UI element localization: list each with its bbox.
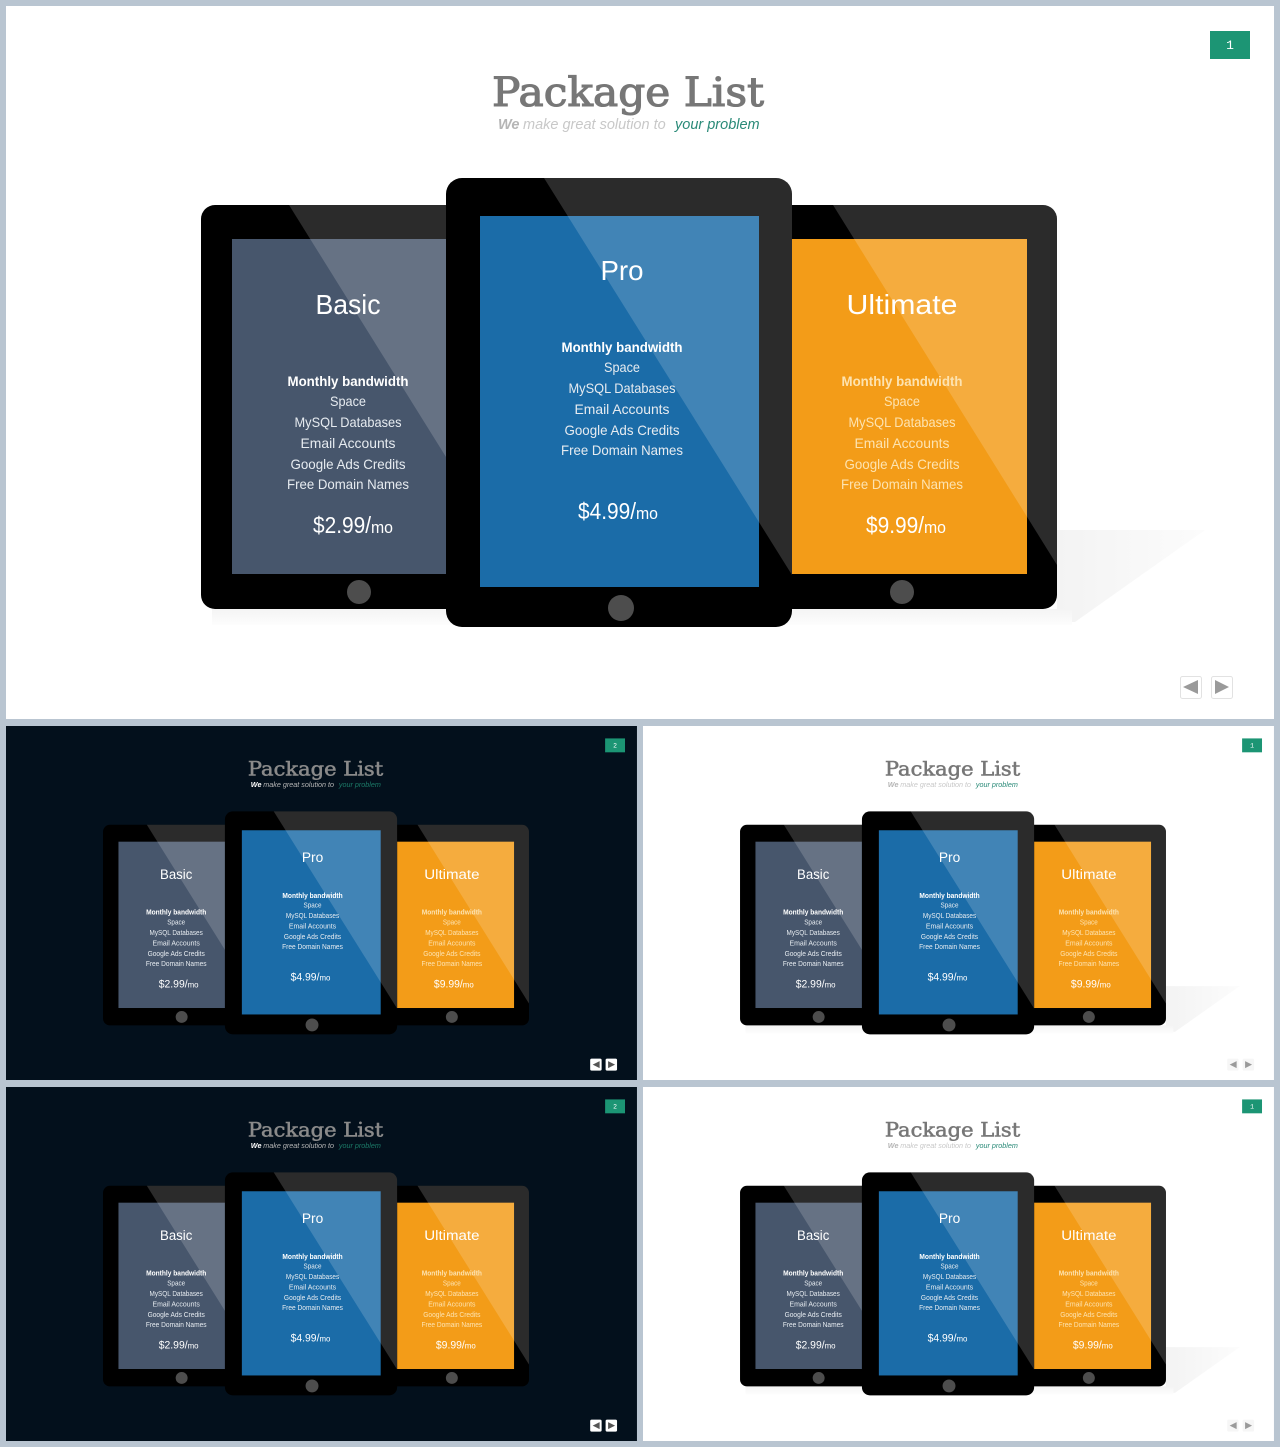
tablet: ultimate: Monthly bandwidth (842, 373, 962, 389)
navigation arrows (1227, 1420, 1254, 1432)
tablet: basic: Basic (160, 1227, 192, 1243)
tablet: basic: Space (167, 1281, 185, 1288)
tablet: pro: $4.99/ (291, 972, 320, 984)
tablet: pro (225, 1172, 397, 1395)
tablet: pro (446, 178, 792, 627)
subtitle: make great solution to (263, 1141, 334, 1150)
tablet: ultimate: Ultimate (1061, 1227, 1117, 1243)
tablet: ultimate (1023, 825, 1166, 1025)
subtitle: your problem (338, 1141, 381, 1150)
tablet: basic (740, 1186, 874, 1386)
subtitle: We (251, 780, 261, 789)
tablet: ultimate: Space (1080, 920, 1098, 927)
subtitle: make great solution to (523, 117, 666, 133)
tablet: pro: Email Accounts (289, 924, 337, 931)
tablet: ultimate: MySQL Databases (1062, 1291, 1116, 1298)
tablet: basic: Email Accounts (153, 1301, 200, 1308)
tablet: pro: Free Domain Names (561, 442, 683, 458)
tablet: pro: Monthly bandwidth (919, 1254, 980, 1261)
tablet: pro: Space (304, 903, 322, 910)
tablet: pro: Monthly bandwidth (562, 339, 682, 355)
tablet: pro: Free Domain Names (919, 1305, 980, 1312)
tablet: ultimate (386, 825, 529, 1025)
tablet: ultimate: mo (1102, 1341, 1113, 1351)
subtitle: your problem (975, 780, 1018, 789)
tablet: pro: Monthly bandwidth (919, 893, 980, 900)
slide 5: light thumbnail bottom right (643, 1087, 1274, 1441)
page number badge (605, 738, 625, 752)
tablet: basic: MySQL Databases (294, 414, 402, 430)
tablet: pro: Email Accounts (926, 1285, 974, 1292)
slide 3: light thumbnail top right (643, 726, 1274, 1080)
tablet: basic: Free Domain Names (146, 1322, 207, 1329)
tablet: pro: Email Accounts (289, 1285, 337, 1292)
tablet: ultimate: Monthly bandwidth (422, 910, 482, 917)
title: Package List (885, 758, 1020, 781)
tablet: basic: mo (825, 980, 836, 990)
tablet: basic: Basic (797, 1227, 829, 1243)
tablet: basic: mo (371, 518, 393, 537)
tablet: ultimate: Space (443, 1281, 461, 1288)
tablet: pro: $4.99/ (928, 972, 957, 984)
tablet: pro: Pro (600, 255, 644, 286)
tablet: basic: MySQL Databases (150, 1291, 203, 1298)
tablet: pro: Google Ads Credits (284, 934, 342, 941)
tablet: ultimate: Google Ads Credits (1060, 951, 1118, 958)
tablet: pro (862, 1172, 1034, 1395)
tablet: ultimate: Ultimate (424, 1227, 480, 1243)
tablet: basic: Google Ads Credits (785, 1312, 842, 1319)
tablet: pro: Pro (302, 1210, 323, 1226)
tablet: pro: Pro (302, 849, 323, 865)
tablet: ultimate (1023, 1186, 1166, 1386)
tablet: ultimate: Monthly bandwidth (1059, 1271, 1119, 1278)
tablet: basic: Monthly bandwidth (146, 910, 206, 917)
tablet: pro: $4.99/ (291, 1333, 320, 1345)
tablet: pro (862, 811, 1034, 1034)
tablet: pro: Email Accounts (926, 924, 974, 931)
tablet: basic: Space (167, 920, 185, 927)
tablet: pro: Space (604, 359, 640, 375)
tablet: basic: $2.99/ (313, 512, 372, 538)
tablet: pro: MySQL Databases (923, 1274, 977, 1281)
tablet: basic (103, 825, 237, 1025)
tablet: ultimate: Space (884, 393, 920, 409)
tablet: basic: Email Accounts (300, 435, 396, 451)
tablet: basic: MySQL Databases (787, 1291, 840, 1298)
tablet: ultimate: Monthly bandwidth (1059, 910, 1119, 917)
tablet: ultimate: MySQL Databases (425, 1291, 479, 1298)
subtitle: We (498, 117, 520, 133)
tablet: basic: Space (804, 1281, 822, 1288)
tablet: pro: Google Ads Credits (921, 934, 979, 941)
tablet: pro: MySQL Databases (286, 1274, 340, 1281)
tablet: pro: Pro (939, 849, 960, 865)
tablet: basic: Monthly bandwidth (288, 373, 408, 389)
tablet: pro: $4.99/ (578, 498, 637, 524)
tablet: pro: Monthly bandwidth (282, 893, 343, 900)
tablet: basic: $2.99/ (796, 979, 825, 991)
tablet: ultimate: Free Domain Names (1058, 1322, 1120, 1329)
subtitle: your problem (975, 1141, 1018, 1150)
tablet: ultimate: Free Domain Names (421, 961, 483, 968)
tablet: basic: Free Domain Names (287, 476, 409, 492)
tablet: ultimate (386, 1186, 529, 1386)
tablet: pro: MySQL Databases (568, 380, 676, 396)
tablet: ultimate: $9.99/ (866, 512, 925, 538)
page number badge (1242, 1099, 1262, 1113)
tablet: ultimate: $9.99/ (1073, 1340, 1103, 1352)
tablet: pro: Google Ads Credits (284, 1295, 342, 1302)
navigation arrows (1180, 676, 1232, 698)
subtitle: make great solution to (900, 780, 971, 789)
tablet: ultimate: mo (463, 980, 474, 990)
subtitle: your problem (338, 780, 381, 789)
tablet: ultimate: Ultimate (1061, 866, 1117, 882)
subtitle: make great solution to (900, 1141, 971, 1150)
tablet: pro: Free Domain Names (282, 1305, 343, 1312)
tablet: basic: Free Domain Names (783, 961, 844, 968)
tablet: ultimate: Email Accounts (428, 940, 476, 947)
tablet: pro: $4.99/ (928, 1333, 957, 1345)
tablet: ultimate: Free Domain Names (841, 476, 963, 492)
tablet: ultimate: Email Accounts (1065, 940, 1113, 947)
page number badge (605, 1099, 625, 1113)
title: Package List (885, 1119, 1020, 1142)
navigation arrows (1227, 1059, 1254, 1071)
tablet: pro: Free Domain Names (282, 944, 343, 951)
tablet: basic: Monthly bandwidth (146, 1271, 206, 1278)
page number badge: 1 (1250, 742, 1254, 749)
tablet: ultimate: Free Domain Names (421, 1322, 483, 1329)
tablet: basic: $2.99/ (159, 1340, 188, 1352)
tablet: pro: MySQL Databases (923, 913, 977, 920)
tablet: ultimate: MySQL Databases (1062, 930, 1116, 937)
page number badge: 2 (613, 742, 617, 749)
tablet: ultimate: Free Domain Names (1058, 961, 1120, 968)
tablet: basic: MySQL Databases (787, 930, 840, 937)
tablet: basic: mo (825, 1341, 836, 1351)
tablet: ultimate: MySQL Databases (848, 414, 956, 430)
navigation arrows (590, 1420, 617, 1432)
tablet: ultimate: mo (465, 1341, 476, 1351)
tablet: basic: Email Accounts (153, 940, 200, 947)
tablet: pro: Monthly bandwidth (282, 1254, 343, 1261)
tablet: pro: mo (956, 1334, 968, 1344)
tablet: pro: Email Accounts (574, 401, 670, 417)
tablet: basic (103, 1186, 237, 1386)
tablet: ultimate: $9.99/ (1071, 979, 1101, 991)
tablet: basic: Monthly bandwidth (783, 910, 843, 917)
tablet: pro: Space (304, 1264, 322, 1271)
tablet: basic: Monthly bandwidth (783, 1271, 843, 1278)
tablet: pro: mo (636, 504, 658, 523)
tablet: pro (225, 811, 397, 1034)
tablet: ultimate: Google Ads Credits (423, 951, 481, 958)
tablet: basic: mo (188, 1341, 199, 1351)
tablet: basic: Email Accounts (790, 1301, 837, 1308)
tablet: basic: Basic (797, 866, 829, 882)
tablet: ultimate: Space (443, 920, 461, 927)
tablet: ultimate: Ultimate (424, 866, 480, 882)
tablet: pro: Space (941, 1264, 959, 1271)
tablet: basic: MySQL Databases (150, 930, 203, 937)
subtitle: make great solution to (263, 780, 334, 789)
tablet: basic: mo (188, 980, 199, 990)
tablet: ultimate: $9.99/ (434, 979, 464, 991)
page number badge: 1 (1226, 38, 1234, 53)
tablet: ultimate: Ultimate (846, 289, 958, 320)
subtitle: your problem (674, 117, 760, 133)
tablet: ultimate: MySQL Databases (425, 930, 479, 937)
tablet: ultimate: Google Ads Credits (1060, 1312, 1118, 1319)
tablet: ultimate: Google Ads Credits (844, 456, 960, 472)
tablet: pro: Pro (939, 1210, 960, 1226)
tablet: pro: Space (941, 903, 959, 910)
tablet: basic: $2.99/ (159, 979, 188, 991)
tablet: basic: Google Ads Credits (148, 951, 205, 958)
tablet: ultimate: $9.99/ (436, 1340, 466, 1352)
tablet: basic: Email Accounts (790, 940, 837, 947)
tablet: pro: mo (319, 973, 331, 983)
tablet: pro: MySQL Databases (286, 913, 340, 920)
tablet: ultimate (770, 205, 1057, 609)
tablet: basic (740, 825, 874, 1025)
title: Package List (248, 1119, 383, 1142)
tablet: pro: mo (319, 1334, 331, 1344)
tablet: basic: Free Domain Names (146, 961, 207, 968)
tablet: pro: mo (956, 973, 968, 983)
page number badge: 1 (1250, 1103, 1254, 1110)
title: Package List (492, 70, 764, 116)
tablet: ultimate: Monthly bandwidth (422, 1271, 482, 1278)
tablet: basic: $2.99/ (796, 1340, 825, 1352)
tablet: ultimate: Space (1080, 1281, 1098, 1288)
page number badge (1242, 738, 1262, 752)
tablet: ultimate: mo (924, 518, 946, 537)
page number badge: 2 (613, 1103, 617, 1110)
tablet: pro: Free Domain Names (919, 944, 980, 951)
tablet: basic (201, 205, 471, 609)
subtitle: We (888, 1141, 898, 1150)
tablet: ultimate: Email Accounts (428, 1301, 476, 1308)
tablet: pro: Google Ads Credits (564, 422, 680, 438)
tablet: basic: Free Domain Names (783, 1322, 844, 1329)
tablet: basic: Google Ads Credits (290, 456, 406, 472)
subtitle: We (888, 780, 898, 789)
tablet: ultimate: Google Ads Credits (423, 1312, 481, 1319)
tablet: basic: Space (804, 920, 822, 927)
tablet: ultimate: mo (1100, 980, 1111, 990)
tablet: basic: Google Ads Credits (148, 1312, 205, 1319)
slide 2: dark thumbnail top left (6, 726, 637, 1080)
slide 4: dark thumbnail bottom left (6, 1087, 637, 1441)
slide 1: large light package list (6, 6, 1274, 719)
tablet: basic: Space (330, 393, 366, 409)
title: Package List (248, 758, 383, 781)
subtitle: We (251, 1141, 261, 1150)
navigation arrows (590, 1059, 617, 1071)
tablet: pro: Google Ads Credits (921, 1295, 979, 1302)
tablet: basic: Google Ads Credits (785, 951, 842, 958)
tablet: basic: Basic (316, 289, 380, 320)
tablet: basic: Basic (160, 866, 192, 882)
page number badge (1210, 31, 1250, 59)
tablet: ultimate: Email Accounts (854, 435, 950, 451)
tablet: ultimate: Email Accounts (1065, 1301, 1113, 1308)
